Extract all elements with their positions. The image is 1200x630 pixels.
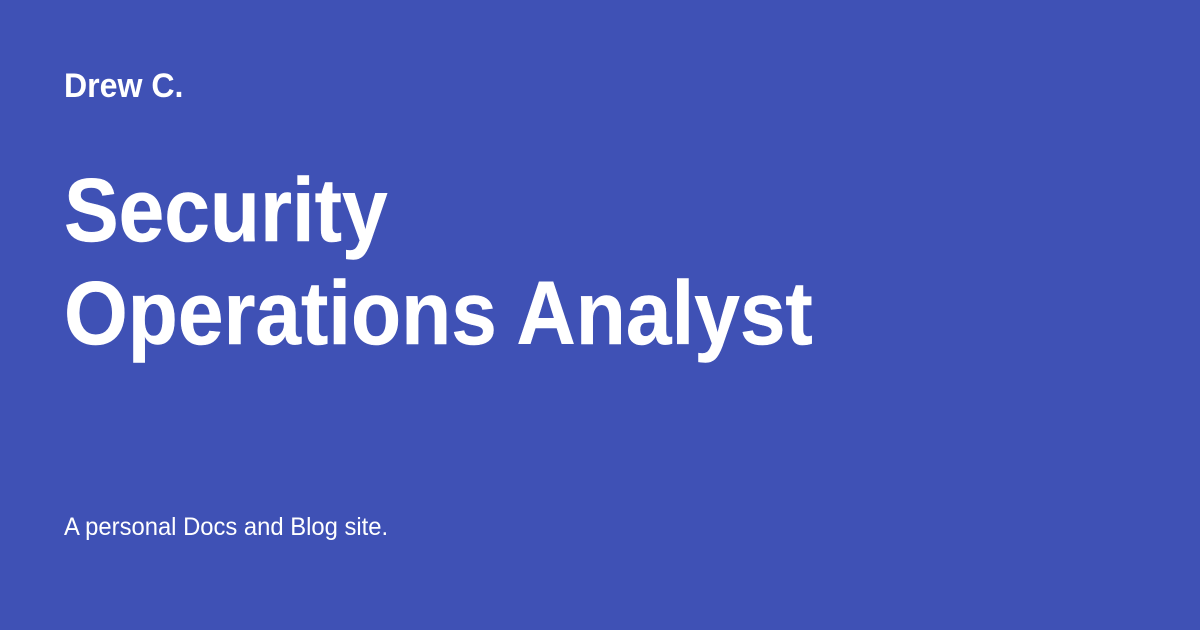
site name: Drew C.	[64, 67, 183, 105]
title: Operations Analyst	[64, 264, 813, 364]
description: A personal Docs and Blog site.	[64, 513, 388, 541]
title	[64, 161, 813, 364]
title: Security	[64, 161, 388, 261]
